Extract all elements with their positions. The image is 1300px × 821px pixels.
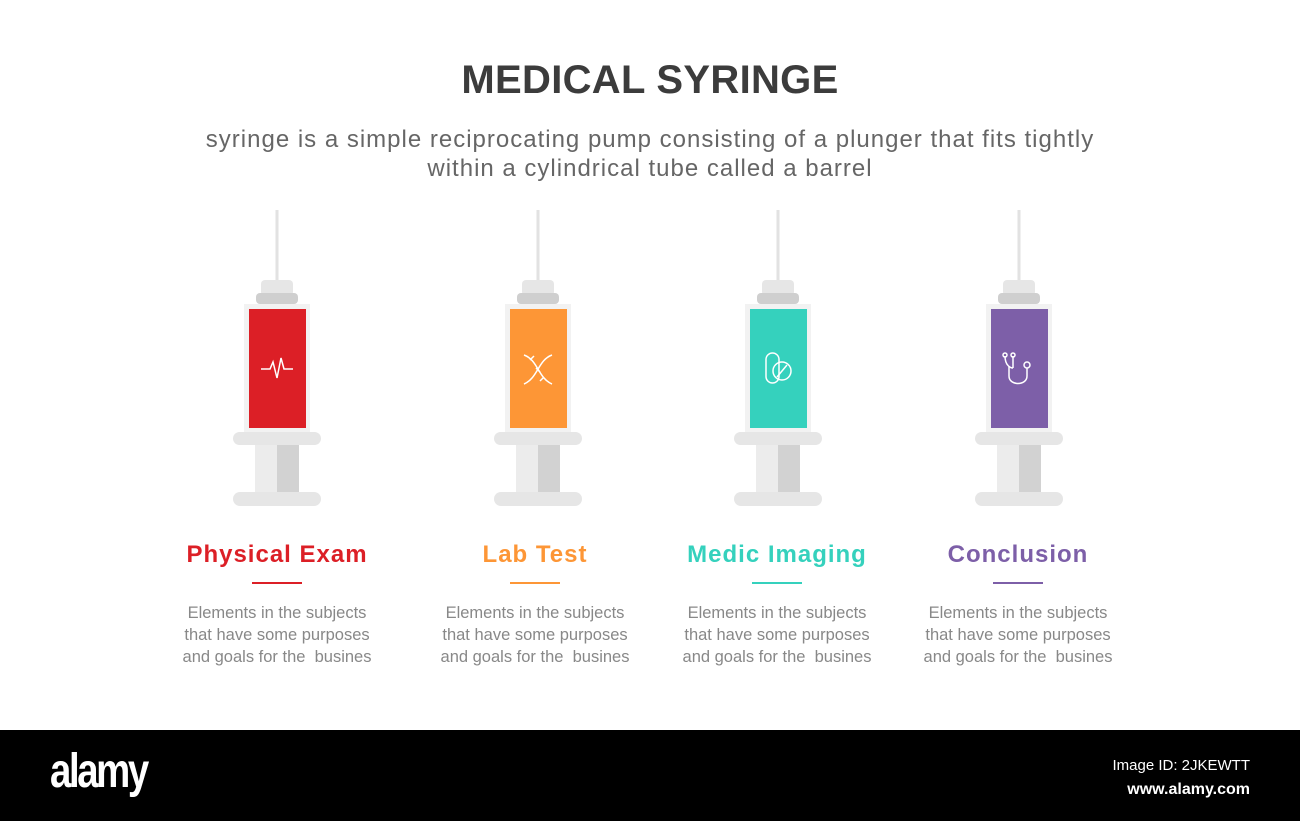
icon: stethoscope [1003,353,1030,384]
item 1 text [183,541,371,666]
icon: heartbeat [261,358,293,378]
syringe 2 [494,210,582,506]
footer bar [0,730,1300,821]
image id: www.alamy.com [1127,781,1250,798]
item 4 text [924,541,1112,666]
subtitle: syringe is a simple reciprocating pump consisting of a plunger that fits tightly [206,126,1094,153]
text: that have some purposes [442,626,628,644]
text: and goals for the busines [924,648,1112,666]
text: Elements in the subjects [446,604,624,622]
text: Physical Exam [186,541,368,568]
item 2 text [441,541,629,666]
text: and goals for the busines [441,648,629,666]
text: and goals for the busines [183,648,371,666]
text: Elements in the subjects [688,604,866,622]
icon: dna [524,355,552,384]
logo: alamy [50,745,147,798]
text: and goals for the busines [683,648,871,666]
text: that have some purposes [684,626,870,644]
icon: pills [766,353,791,383]
text: Conclusion [948,541,1088,568]
subtitle [206,126,1094,182]
syringe 4 [975,210,1063,506]
item 3 text [683,541,871,666]
text: that have some purposes [184,626,370,644]
subtitle: within a cylindrical tube called a barrel [427,155,873,182]
image id [1112,757,1250,798]
text: Medic Imaging [687,541,867,568]
syringe 3 [734,210,822,506]
image id: Image ID: 2JKEWTT [1112,757,1250,774]
text: Elements in the subjects [188,604,366,622]
syringe 1 [233,210,321,506]
text: Lab Test [483,541,587,568]
text: that have some purposes [925,626,1111,644]
text: Elements in the subjects [929,604,1107,622]
title: MEDICAL SYRINGE [461,58,839,102]
